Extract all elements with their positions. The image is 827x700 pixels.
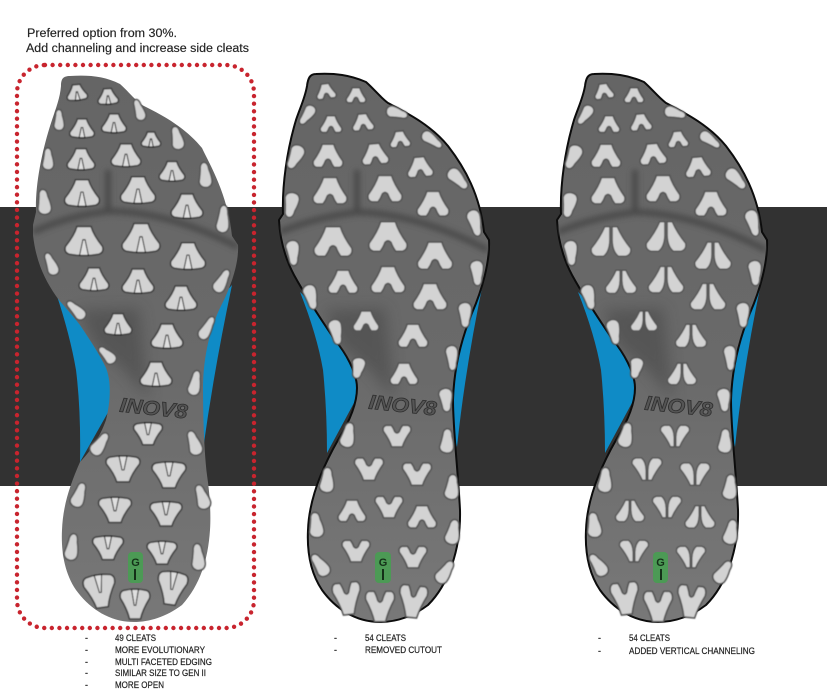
notes: option 1 bbox=[85, 633, 212, 690]
notes: option 1: 49 CLEATS bbox=[115, 633, 156, 643]
notes: option 3: - bbox=[598, 633, 601, 643]
notes: option 3: ADDED VERTICAL CHANNELING bbox=[629, 646, 755, 656]
sole outline bbox=[33, 76, 238, 622]
sole outline bbox=[557, 74, 767, 622]
notes: option 1: - bbox=[85, 657, 88, 667]
flex grooves and midfoot shading bbox=[558, 170, 766, 400]
cleats bbox=[282, 82, 485, 622]
notes: option 2: REMOVED CUTOUT bbox=[365, 645, 442, 655]
cleats bbox=[36, 84, 234, 619]
green badge bbox=[653, 552, 668, 583]
logo: INOV8 bbox=[644, 393, 715, 422]
heading text: Preferred option from 30%. bbox=[27, 28, 177, 40]
notes: option 1: - bbox=[85, 633, 88, 643]
notes: option 3: 54 CLEATS bbox=[629, 633, 670, 643]
red dotted highlight around preferred option bbox=[17, 65, 254, 628]
notes: option 1: - bbox=[85, 645, 88, 655]
green badge bbox=[375, 552, 391, 583]
heading text: Add channeling and increase side cleats bbox=[26, 43, 249, 55]
green badge: G bbox=[656, 557, 665, 569]
flex grooves and midfoot shading bbox=[280, 170, 488, 400]
notes: option 2: - bbox=[334, 645, 337, 655]
notes: option 2: - bbox=[334, 633, 337, 643]
blue midsole panels bbox=[56, 285, 232, 462]
notes: option 3: - bbox=[598, 646, 601, 656]
logo: INOV8 bbox=[368, 392, 439, 421]
notes: option 1: MORE OPEN bbox=[115, 680, 164, 690]
notes: option 1: - bbox=[85, 680, 88, 690]
green badge bbox=[128, 552, 143, 583]
panel: sole option 1 bbox=[33, 76, 238, 622]
panel: sole option 3 bbox=[557, 74, 767, 622]
dark background band bbox=[0, 207, 827, 486]
notes: option 1: SIMILAR SIZE TO GEN II bbox=[115, 668, 206, 678]
heading text bbox=[26, 28, 249, 55]
notes: option 1: MULTI FACETED EDGING bbox=[115, 657, 212, 667]
blue midsole panels bbox=[300, 283, 483, 453]
green badge: G bbox=[379, 557, 387, 569]
sole outline bbox=[279, 74, 489, 622]
logo: INOV8 bbox=[119, 395, 190, 424]
notes: option 3 bbox=[598, 633, 755, 656]
panel: sole option 2 bbox=[279, 74, 489, 622]
cleats bbox=[560, 82, 763, 622]
notes: option 1: MORE EVOLUTIONARY bbox=[115, 645, 205, 655]
notes: option 2: 54 CLEATS bbox=[365, 633, 406, 643]
flex grooves and midfoot shading bbox=[33, 170, 238, 400]
notes: option 1: - bbox=[85, 668, 88, 678]
notes: option 2 bbox=[334, 633, 442, 655]
blue midsole panels bbox=[578, 283, 761, 453]
green badge: G bbox=[131, 557, 140, 569]
